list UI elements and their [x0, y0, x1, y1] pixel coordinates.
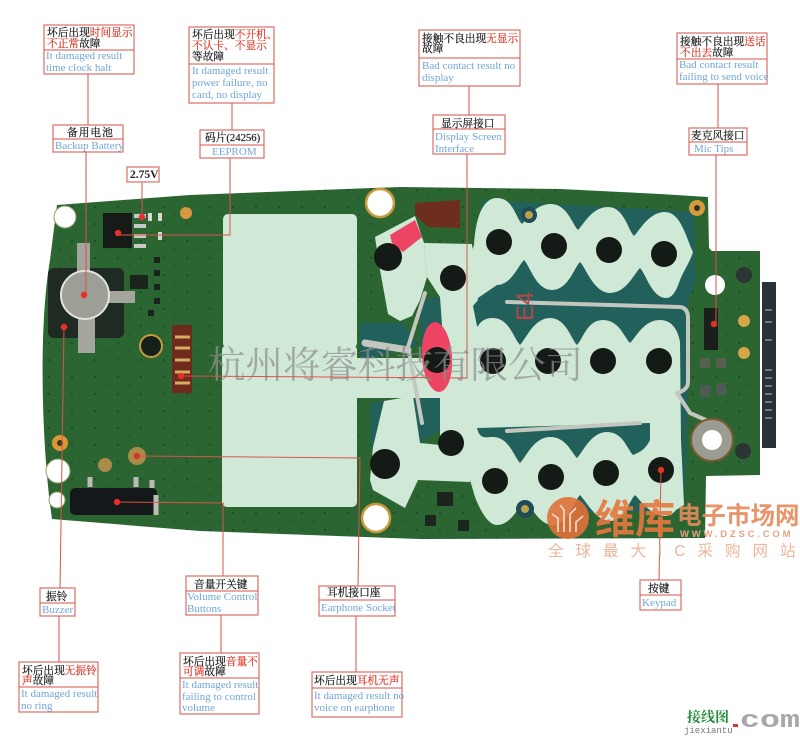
red highlights — [390, 220, 454, 393]
callout: display fault — [419, 30, 520, 86]
callout: earphone fault: 坏后出现耳机无声 — [314, 674, 400, 687]
label: EEPROM: EEPROM — [212, 146, 257, 158]
callout: display fault: display — [422, 72, 454, 84]
label: 2.75V: 2.75V — [130, 169, 159, 181]
label: buzzer — [40, 588, 75, 616]
bottom transistors — [425, 492, 469, 531]
label: EEPROM — [200, 130, 264, 158]
label: backup battery: Backup Battery — [55, 140, 124, 152]
label: keypad: Keypad — [642, 597, 677, 609]
label: earphone socket — [319, 586, 396, 616]
teal wave between lower keys — [477, 423, 650, 463]
callout: power fault: 等故障 — [192, 50, 224, 63]
leader lines — [59, 74, 718, 672]
callout: clock fault: It damaged result — [46, 50, 122, 62]
callout: display fault: Bad contact result no — [422, 60, 516, 72]
callout: clock fault: time clock halt — [46, 62, 111, 74]
silkscreen E4: E4 — [512, 292, 539, 321]
callout: ring fault — [19, 662, 98, 712]
board outline — [43, 187, 760, 539]
logo slogan: 全球最大IC采购网站 — [548, 542, 800, 560]
keypad teal backing — [472, 200, 696, 512]
callout: volume fault: It damaged result — [182, 679, 258, 691]
footer: jiexiantu logo — [684, 708, 800, 736]
footer: jiexiantu logo: 接线图 — [687, 709, 729, 726]
callout: clock fault — [44, 25, 134, 74]
callout: clock fault: 不正常故障 — [47, 37, 101, 50]
keypad contact holes — [370, 229, 677, 494]
callout: power fault — [189, 27, 278, 103]
label: display interface: Display Screen — [435, 131, 502, 143]
callout: display fault: 接触不良出现无显示 — [422, 32, 519, 45]
side switch — [70, 477, 157, 515]
logo: dzsc — [547, 497, 800, 560]
callout: earphone fault: It damaged result no — [314, 690, 405, 702]
label: backup battery: 备用电池 — [67, 126, 114, 139]
backup battery — [48, 243, 135, 353]
label: mic: 麦克风接口 — [691, 129, 744, 142]
callout: ring fault: It damaged result — [21, 688, 97, 700]
label: backup battery — [53, 125, 124, 152]
volume button coils — [98, 447, 146, 472]
label: buzzer: 振铃 — [46, 590, 68, 603]
label: buzzer: Buzzer — [42, 604, 73, 616]
label: earphone socket: Earphone Socket — [321, 602, 396, 614]
callout: ring fault: 坏后出现无振铃 — [22, 664, 97, 677]
label: volume buttons: Volume Control — [187, 591, 257, 603]
callout: earphone fault — [312, 672, 405, 717]
label: volume buttons: Buttons — [187, 603, 221, 615]
callout: mic fault — [677, 33, 769, 84]
callout: power fault: 不认卡、不显示 — [192, 39, 267, 52]
callout: clock fault: 坏后出现时间显示 — [47, 26, 133, 39]
callout: earphone fault: voice on earphone — [314, 702, 395, 714]
callout: power fault: It damaged result — [192, 65, 268, 77]
label: display interface: Interface — [435, 143, 474, 155]
callout: ring fault: 声故障 — [22, 674, 54, 687]
callout: mic fault: failing to send voice — [679, 71, 769, 83]
EEPROM chip — [103, 213, 160, 248]
connection dots — [61, 214, 717, 505]
callout: volume fault: 可调故障 — [183, 665, 226, 678]
callout: volume fault — [180, 653, 259, 714]
label: keypad: 按键 — [648, 582, 670, 595]
icon: circuit circle — [547, 497, 589, 539]
callout: volume fault: volume — [182, 702, 215, 714]
logo wordmark: 维库 — [595, 498, 675, 542]
label: mic — [689, 128, 747, 155]
footer: jiexiantu logo: com — [740, 708, 800, 735]
callout: ring fault: no ring — [21, 700, 53, 712]
callout: power fault: power failure, no — [192, 77, 268, 89]
solder pads — [52, 200, 752, 518]
callout: display fault: 故障 — [422, 42, 444, 55]
label: display interface — [433, 115, 505, 155]
logo url: WWW.DZSC.COM — [680, 529, 793, 540]
callout: power fault: 坏后出现不开机、 — [192, 28, 278, 41]
callout: power fault: card, no display — [192, 89, 262, 101]
company watermark: 杭州将睿科技有限公司 — [208, 345, 583, 387]
callout: volume fault: 坏后出现音量不 — [183, 655, 258, 668]
label: display interface: 显示屏接口 — [441, 117, 494, 130]
mounting holes — [46, 189, 725, 532]
brown pad — [415, 200, 460, 228]
side connector — [762, 282, 776, 448]
label: EEPROM: 码片(24256) — [205, 131, 261, 144]
label: mic: Mic Tips — [694, 143, 733, 155]
label: keypad — [640, 580, 681, 610]
teal backing left — [360, 297, 442, 447]
screw ring — [691, 419, 733, 461]
callout: volume fault: failing to control — [182, 691, 256, 703]
label: volume buttons — [186, 576, 258, 615]
callout: mic fault: Bad contact result — [679, 59, 758, 71]
label: earphone socket: 耳机接口座 — [327, 586, 381, 599]
mic connector — [700, 308, 726, 397]
callout: mic fault: 接触不良出现送话 — [680, 35, 766, 48]
logo subtitle: 电子市场网 — [677, 502, 800, 530]
silver traces — [365, 293, 708, 431]
footer: jiexiantu logo: jiexiantu — [684, 726, 733, 736]
LCD and keypad membrane — [222, 198, 693, 525]
callout: mic fault: 不出去故障 — [680, 46, 734, 59]
label: volume buttons: 音量开关键 — [194, 578, 248, 591]
small components — [130, 257, 160, 316]
display flex connector — [172, 325, 192, 393]
circuit board — [43, 187, 776, 539]
